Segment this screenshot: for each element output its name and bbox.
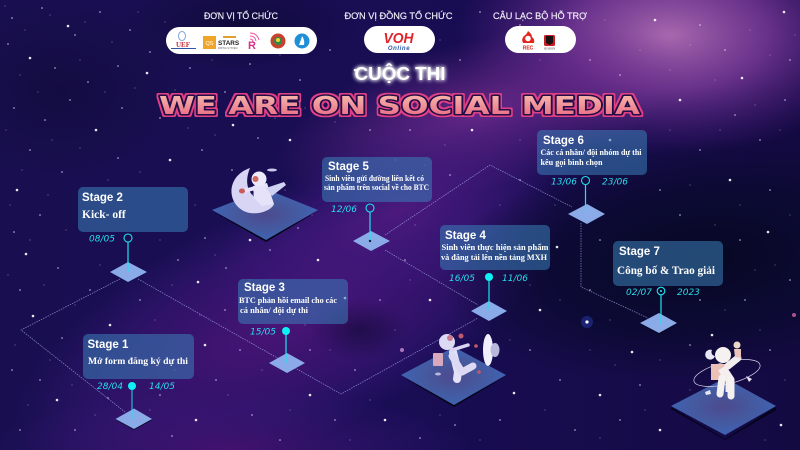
stage 7 pin xyxy=(657,287,665,324)
stage 3 date: 15/05 xyxy=(250,328,276,338)
stage 1 description: Mở form đăng ký dự thi xyxy=(88,356,188,367)
stage 6 card xyxy=(537,130,647,175)
stage 6 pin xyxy=(582,176,590,212)
supporting clubs logos pill xyxy=(505,26,576,53)
stage 1 end date: 14/05 xyxy=(149,382,175,392)
stage 2 pin xyxy=(124,234,132,272)
stage 3 description: BTC phản hồi email cho các xyxy=(239,296,337,305)
logo: student association xyxy=(294,34,310,48)
logo: R xyxy=(248,33,259,52)
stage 2 xyxy=(78,187,188,282)
icon: astronaut on crescent moon xyxy=(231,168,286,213)
stage 1 diamond xyxy=(116,408,152,430)
stage 2 heading: Stage 2 xyxy=(82,192,123,204)
stage 2 diamond xyxy=(110,262,147,282)
stage 6 description: kêu gọi bình chọn xyxy=(540,158,603,167)
stage 5 heading: Stage 5 xyxy=(328,161,370,173)
logo: QS Stars: STARS xyxy=(218,40,240,47)
platform: astronaut with creative objects xyxy=(401,334,506,407)
logo: youth union xyxy=(270,34,286,48)
platform: astronaut with ring xyxy=(671,342,776,440)
logo: club emblem: SESSION xyxy=(544,48,555,50)
heading: co-organizer: ĐƠN VỊ ĐỒNG TỔ CHỨC xyxy=(344,10,453,21)
stage 7 start date: 02/07 xyxy=(626,288,652,298)
co-organizer logo pill: VOH: VOH xyxy=(384,30,415,47)
stage 3 pin xyxy=(282,327,290,363)
connecting dotted path xyxy=(21,165,648,412)
icon: astronaut with orbit ring xyxy=(691,342,763,396)
organizer logos pill xyxy=(166,27,317,54)
stage 3 description: cá nhân/ đội dự thi xyxy=(240,306,309,315)
stage 4 start date: 16/05 xyxy=(449,274,475,284)
stage 6 description: Các cá nhân/ đội nhóm dự thi xyxy=(540,148,642,157)
stage 6 diamond xyxy=(568,204,605,224)
heading: supporting clubs: CÂU LẠC BỘ HỖ TRỢ xyxy=(493,10,587,21)
stage 6 end date: 23/06 xyxy=(602,178,628,188)
stage 3 diamond xyxy=(269,353,305,373)
stage 5 pin xyxy=(366,204,374,242)
stage 5 description xyxy=(324,174,429,192)
logo: QS Stars: QS xyxy=(206,41,214,47)
stage 3 xyxy=(238,279,348,373)
stage 5 diamond xyxy=(353,231,390,251)
stage 2 card xyxy=(78,187,188,232)
stage 2 date: 08/05 xyxy=(89,234,115,244)
stage 6 xyxy=(537,130,647,224)
stage 4 end date: 11/06 xyxy=(502,274,528,284)
stage 1 start date: 28/04 xyxy=(97,382,123,392)
icon: floating astronaut xyxy=(433,334,500,379)
co-organizer logo pill: VOH: Online xyxy=(388,46,410,52)
logo: R: R xyxy=(248,40,256,52)
stage 3 card xyxy=(238,279,348,324)
logo: REC: REC xyxy=(523,46,534,52)
stage 1 pin xyxy=(128,382,136,419)
stage 1 card xyxy=(83,334,194,379)
heading: organizer: ĐƠN VỊ TỔ CHỨC xyxy=(204,10,278,21)
logo: UEF: UEF xyxy=(176,41,190,49)
stage 7 diamond xyxy=(640,313,677,335)
stage 4 xyxy=(440,225,550,321)
stage 4 heading: Stage 4 xyxy=(445,230,487,242)
subtitle: CUỘC THI: CUỘC THI xyxy=(354,63,446,84)
stage 7 year: 2023 xyxy=(677,288,700,298)
stage 1 xyxy=(83,334,194,430)
stage 4 diamond xyxy=(471,301,507,321)
stage 5 card xyxy=(322,157,432,202)
stage 7 card xyxy=(613,241,723,286)
stage 2 title: Kick- off xyxy=(82,209,126,221)
logo: UEF xyxy=(171,32,196,49)
stage 4 card xyxy=(440,225,550,270)
stage 5 description: sản phẩm trên social về cho BTC xyxy=(324,183,429,192)
stage 4 description xyxy=(441,243,549,262)
stage 6 description xyxy=(540,148,642,167)
stage 6 heading: Stage 6 xyxy=(543,135,584,147)
stage 4 description: Sinh viên thực hiện sản phẩm xyxy=(442,243,549,252)
stage 5 date: 12/06 xyxy=(331,205,357,215)
stage 4 pin xyxy=(485,273,493,310)
logo: QS Stars xyxy=(203,36,240,50)
stage 3 heading: Stage 3 xyxy=(244,282,285,294)
stage 5 description: Sinh viên gửi đường liên kết có xyxy=(325,174,424,183)
stage 5 xyxy=(322,157,432,251)
co-organizer logo pill: VOH xyxy=(364,26,435,53)
stage 4 description: và đăng tải lên nền tảng MXH xyxy=(441,253,548,262)
stage 7 xyxy=(613,241,723,335)
stage 6 start date: 13/06 xyxy=(551,178,577,188)
stage 7 title: Công bố & Trao giải xyxy=(617,264,716,277)
stage 3 description xyxy=(239,296,337,315)
stage 1 heading: Stage 1 xyxy=(88,339,129,351)
stage 7 heading: Stage 7 xyxy=(619,246,660,258)
platform: moon astronaut xyxy=(212,168,318,242)
logo: QS Stars: RATING SYSTEM xyxy=(218,47,237,50)
title: WE ARE ON SOCIAL MEDIA: WE ARE ON SOCIAL MEDIA xyxy=(159,91,641,120)
